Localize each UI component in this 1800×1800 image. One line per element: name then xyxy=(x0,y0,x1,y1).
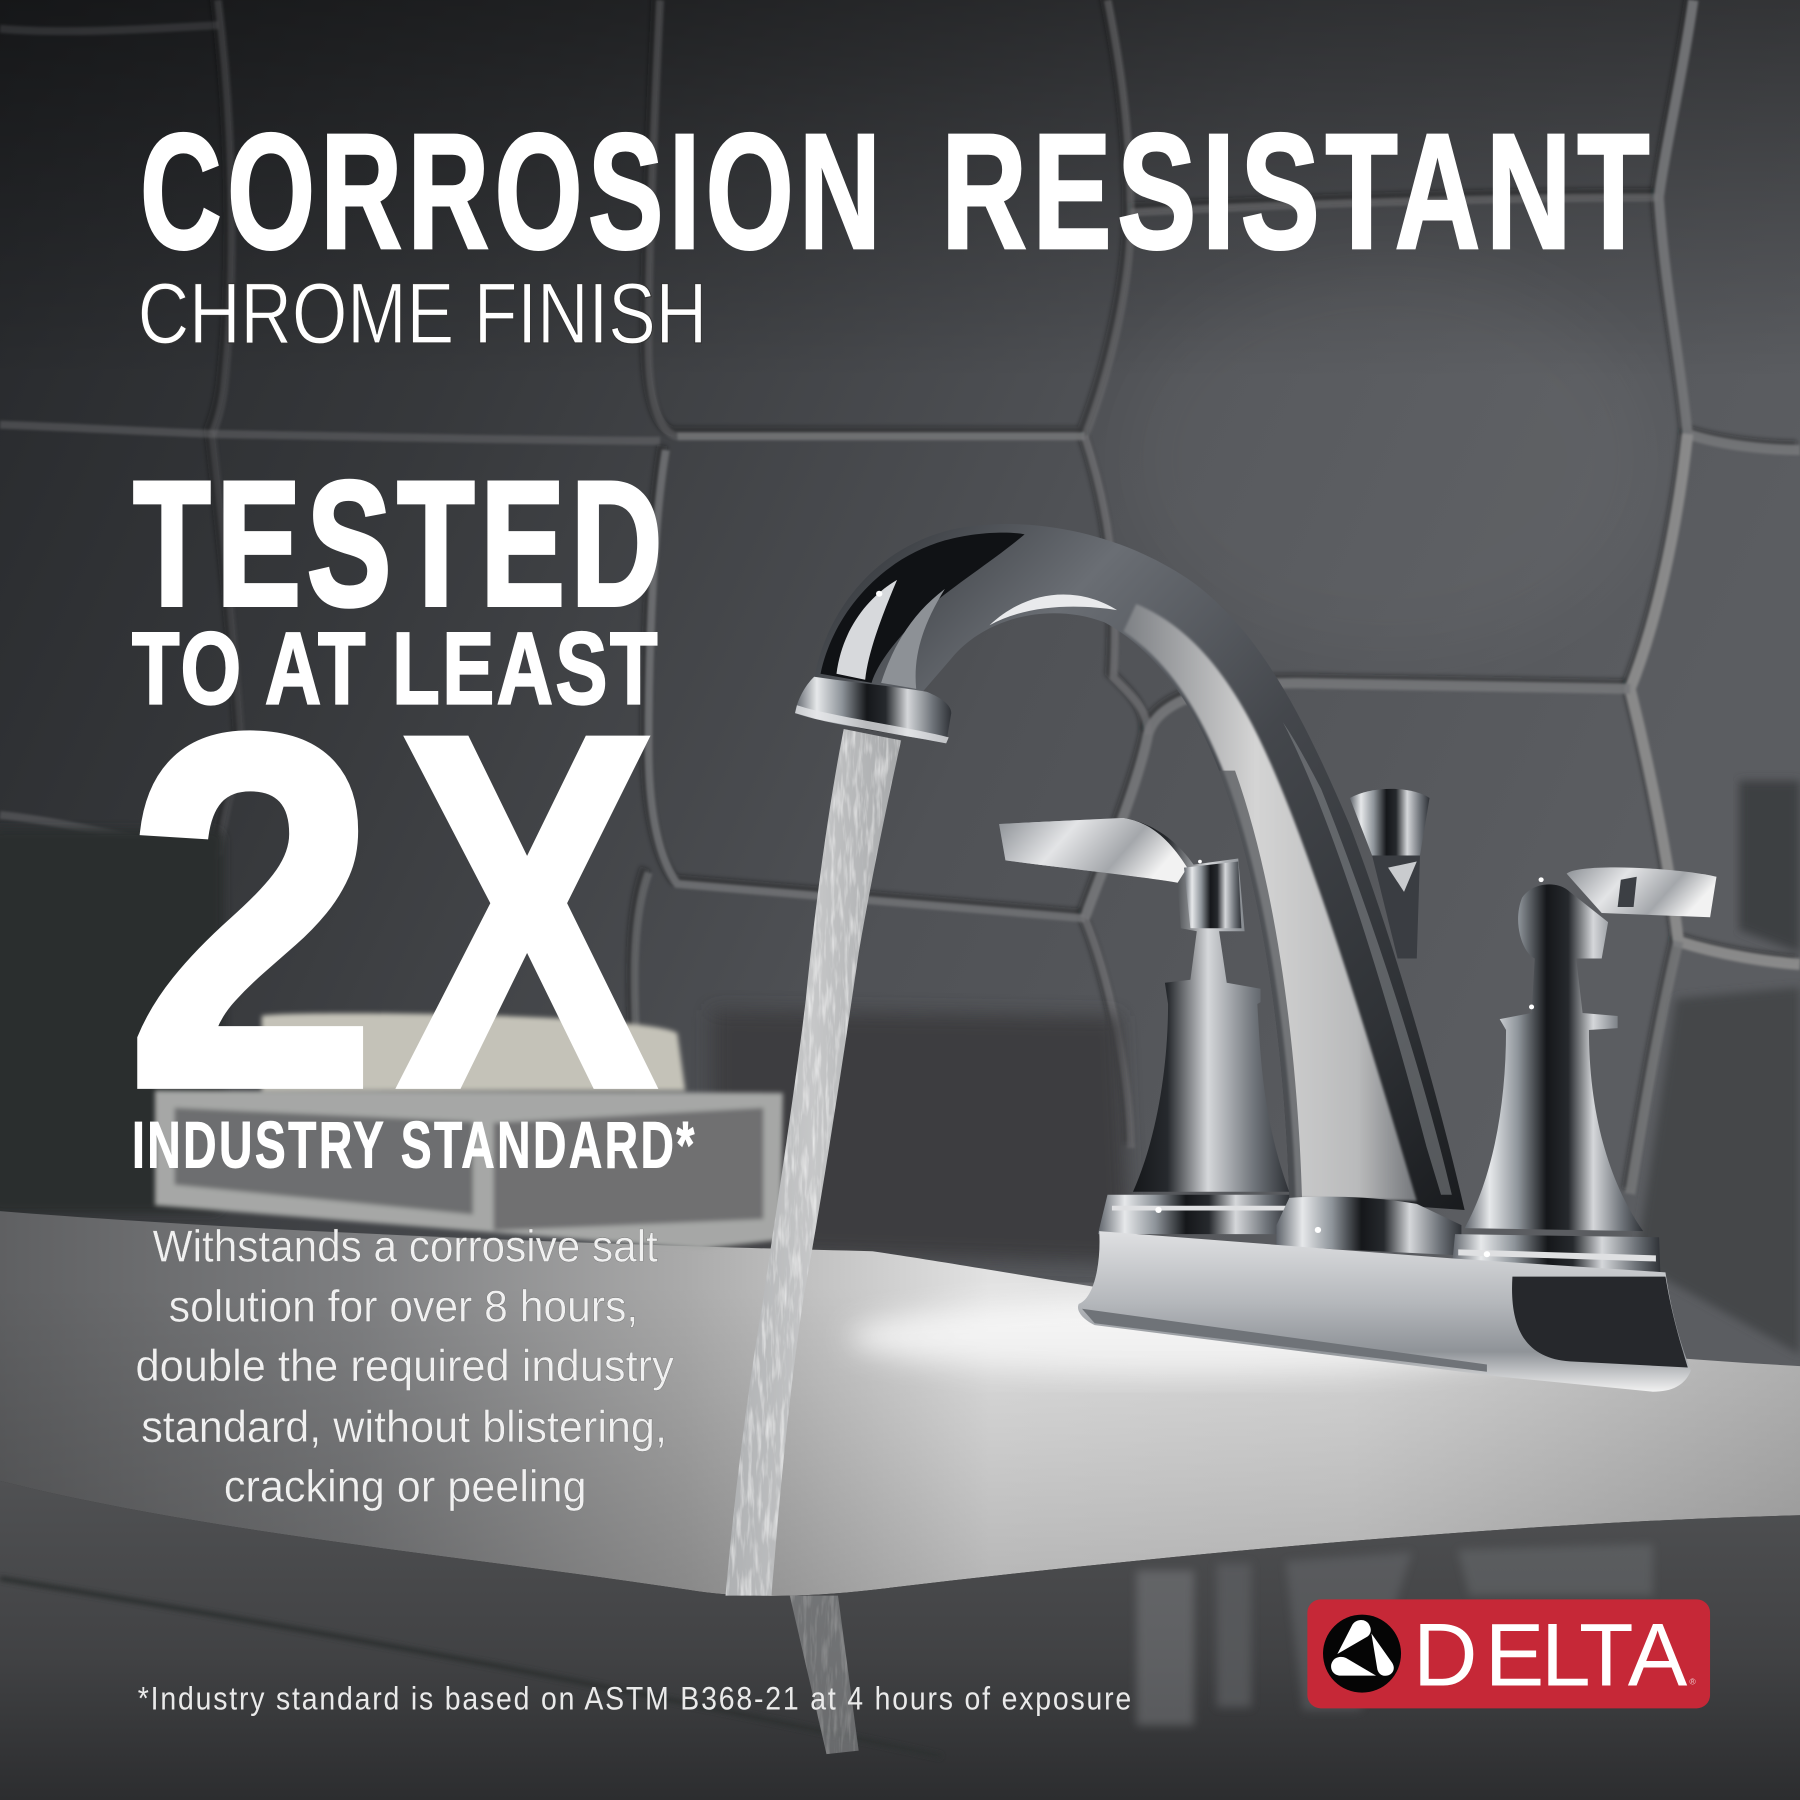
water stream reflection xyxy=(790,1596,859,1754)
deck plate xyxy=(1078,1231,1691,1392)
faucet reflection xyxy=(1136,1544,1653,1725)
faucet xyxy=(795,524,1716,1392)
description text: solution for over 8 hours, xyxy=(169,1281,638,1331)
callout: 2X: X xyxy=(396,630,660,1194)
lift rod xyxy=(1350,789,1430,959)
logo: Delta xyxy=(1307,1599,1710,1708)
water stream xyxy=(726,729,901,1596)
description text xyxy=(135,1222,674,1512)
footnote: *Industry standard is based on ASTM B368-21 at 4 hours of exposure xyxy=(138,1680,1133,1716)
callout: 2X: 2 xyxy=(124,630,379,1194)
left handle xyxy=(999,818,1289,1234)
spout nozzle xyxy=(795,677,951,743)
spout xyxy=(814,524,1465,1210)
center ring xyxy=(1276,1197,1461,1255)
background: dark objects behind the basin xyxy=(0,781,1800,1355)
wordmark: DELTA xyxy=(1413,1604,1688,1704)
description text: double the required industry xyxy=(135,1341,674,1391)
description text: Withstands a corrosive salt xyxy=(153,1222,658,1272)
background: basin counter xyxy=(0,1211,1800,1800)
title: CORROSION xyxy=(140,99,886,283)
description text: standard, without blistering, xyxy=(141,1402,667,1452)
background: tile wall xyxy=(0,0,1800,1378)
subtitle: CHROME FINISH xyxy=(138,266,707,362)
callout: tested: TESTED xyxy=(133,444,668,643)
callout: industry standard: INDUSTRY STANDARD* xyxy=(132,1108,697,1181)
soap dish xyxy=(155,1013,783,1249)
sparkles xyxy=(1155,860,1544,1257)
callout: 2X xyxy=(124,630,660,1194)
registered mark: ® xyxy=(1689,1677,1696,1687)
callout: to at least: TO AT LEAST xyxy=(132,612,660,726)
right handle xyxy=(1452,867,1716,1274)
icon: Delta triangle mark xyxy=(1323,1615,1401,1693)
description text: cracking or peeling xyxy=(224,1462,587,1512)
